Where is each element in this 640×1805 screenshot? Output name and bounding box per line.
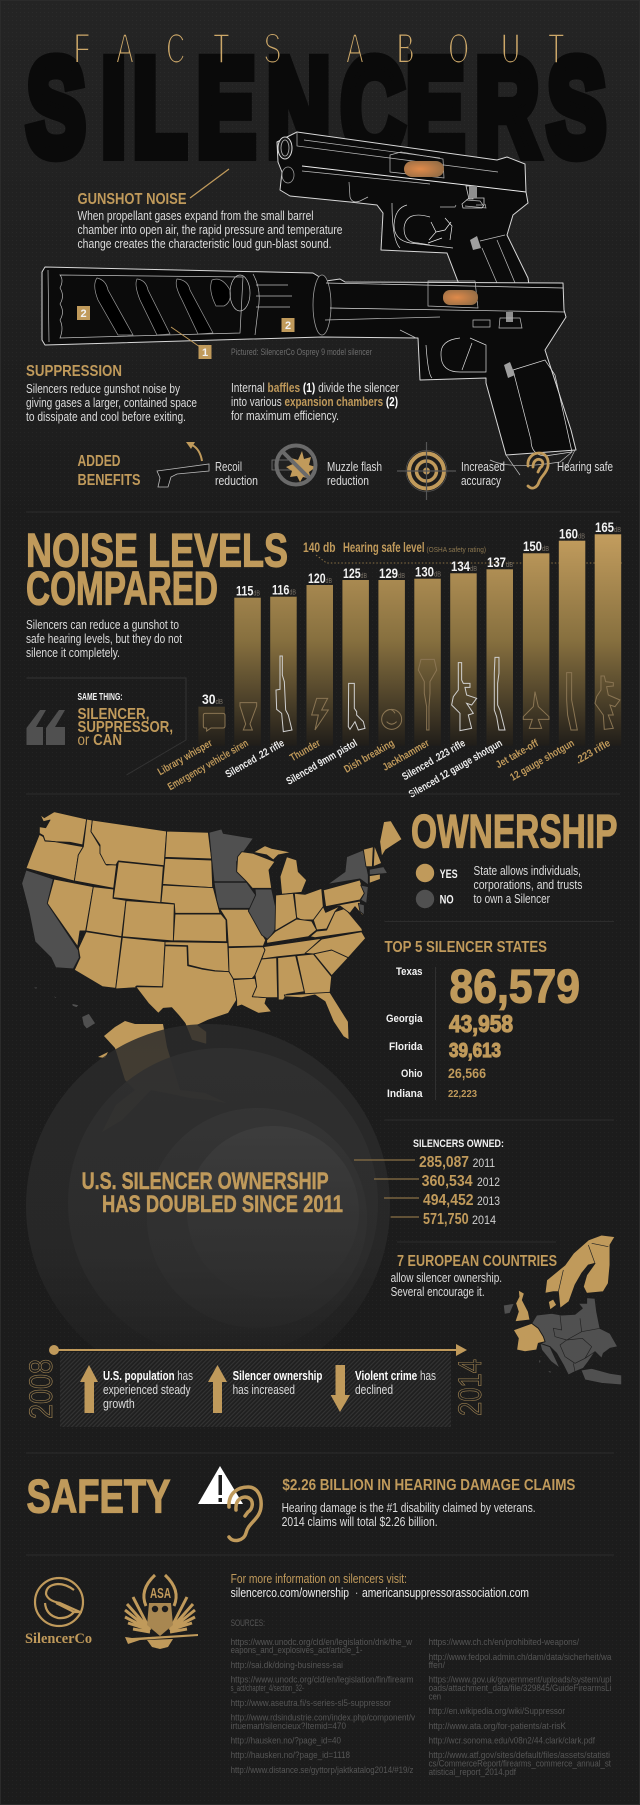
sources list: eapons_and_explosives_act/article_1- [231, 1645, 362, 1656]
bar: library whisper 30 dB: 30dB [202, 691, 223, 707]
bar: jet take-off 150 dB [523, 538, 549, 746]
logo: ASA owl [125, 1575, 198, 1649]
axis labels: noise sources: Silenced 9mm pistol [284, 737, 360, 788]
text: increased accuracy: Increased [461, 460, 505, 474]
list: top 5 states: 26,566 [448, 1066, 486, 1081]
text: gunshot noise explanation: When propellant gases expand from the small barrel [78, 209, 314, 223]
list: silencers owned by year: SILENCERS OWNED: [413, 1138, 504, 1150]
text: more information: For more information on silencers visit: [231, 1572, 407, 1586]
text: hearing safe: Hearing safe [557, 460, 613, 474]
panel: same thing callout: SILENCER, [78, 706, 150, 723]
heading: hearing damage claims: $2.26 BILLION IN HEARING DAMAGE CLAIMS [282, 1477, 575, 1494]
sources list: http://hausken.no/?page_id=1118 [231, 1750, 350, 1761]
label: marker 2 right [282, 318, 294, 332]
heading: suppression: SUPPRESSION [26, 363, 122, 380]
caption: pictured model: Pictured: SilencerCo Osprey 9 model silencer [231, 347, 372, 357]
timeline: 2008 to 2014 [23, 1344, 488, 1427]
text: silencer ownership [233, 1369, 323, 1397]
list: silencers owned by year: 360,534 [422, 1173, 473, 1190]
bar: dish breaking 129 dB [378, 565, 405, 746]
axis labels: noise sources: Silenced .22 rifle [223, 737, 287, 781]
bar: 12 gauge shotgun 160 dB [559, 526, 585, 746]
sources list: http://www.distance.se/gyttorp/jaktkatalog2014/#19/z [231, 1765, 414, 1776]
axis labels: noise sources: Jet take-off [494, 737, 541, 771]
text: violent crime: Violent crime has [355, 1369, 436, 1383]
text: noise intro: Silencers can reduce a gunshot to [26, 618, 179, 632]
icon: recoil gun and arrow [157, 442, 209, 487]
title: silencers: SILENCERS [27, 32, 606, 184]
list: top 5 states: 43,958 [449, 1011, 513, 1038]
bar: silenced 12 gauge shotgun 137 dB: 137dB [487, 554, 513, 570]
arrow up: silencer ownership [208, 1365, 227, 1413]
map: Alaska [98, 1021, 226, 1132]
bar: library whisper 30 dB [198, 691, 225, 746]
bar: thunder 120 dB: 120dB [308, 570, 332, 586]
bar: emergency vehicle siren 115 dB [234, 582, 261, 746]
panel: same thing callout [26, 678, 186, 775]
sources list: http://en.wikipedia.org/wiki/Suppressor [429, 1706, 565, 1717]
text: muzzle flash reduction: reduction [327, 474, 369, 488]
list: top 5 states: 22,223 [448, 1088, 477, 1100]
text: population: experienced steady [103, 1383, 191, 1397]
bar: emergency vehicle siren 115 dB: 115dB [236, 582, 260, 598]
list: silencers owned by year: 2014 [472, 1213, 496, 1227]
axis labels: noise sources: .223 rifle [574, 737, 613, 767]
callout line: gunshot noise [190, 169, 229, 198]
map: Europe [503, 1235, 622, 1385]
heading: noise levels compared [26, 524, 288, 614]
sources list: irtuemart/silencieux?Itemid=470 [231, 1721, 346, 1732]
text: suppression explanation: Silencers reduce gunshot noise by [26, 382, 181, 396]
text: europe explanation [391, 1271, 502, 1299]
list: silencers owned by year: 2012 [477, 1175, 500, 1189]
heading: noise levels compared: COMPARED [26, 562, 218, 614]
text: recoil reduction: Recoil [215, 460, 242, 474]
text: recoil reduction: reduction [215, 474, 258, 488]
text: baffles and chambers: for maximum efficiency. [231, 409, 339, 423]
bar: .223 rifle 165 dB: 165dB [595, 519, 621, 535]
icon: ear [528, 453, 548, 488]
sources list: http://hausken.no/?page_id=40 [231, 1736, 341, 1746]
text: noise intro: silence it completely. [26, 646, 120, 660]
list: silencers owned by year: 571,750 [423, 1211, 469, 1228]
bar: .223 rifle 165 dB [595, 519, 621, 746]
logo: ASA owl: ASA [150, 1585, 171, 1602]
list: silencers owned by year: 285,087 [419, 1154, 469, 1171]
label: marker 1 [198, 345, 212, 359]
icon: quotation mark [26, 710, 65, 745]
heading: ownership doubled: U.S. SILENCER OWNERSHIP [82, 1168, 329, 1195]
icon: muzzle flash crossed out [272, 446, 316, 484]
text: suppression explanation: to dissipate and cool before exiting. [26, 410, 186, 424]
sources list [231, 1618, 612, 1778]
map: United States ownership [22, 812, 402, 1044]
list: top 5 states: 39,613 [449, 1040, 501, 1062]
list: silencers owned by year [354, 1138, 504, 1228]
panel: same thing callout: SAME THING: [78, 692, 122, 703]
text: muzzle flash reduction: Muzzle flash [327, 460, 382, 474]
text: more information: americansuppressorassociation.com [362, 1586, 529, 1600]
legend: yes and no [416, 864, 582, 908]
sources list: http://www.aseutra.fi/s-series-sl5-suppressor [231, 1698, 391, 1709]
text: baffles and chambers [231, 381, 399, 423]
heading: added benefits: BENEFITS [78, 472, 140, 489]
icon: warning triangle and ear [198, 1466, 261, 1540]
text: baffles and chambers: Internal baffles (1) divide the silencer [231, 381, 399, 395]
sources list: http://www.rdsindustrie.com/index.php/component/v [231, 1712, 415, 1724]
heading: added benefits: ADDED [78, 453, 120, 470]
heading: safety: SAFETY [26, 1470, 170, 1522]
text: hearing damage [282, 1501, 536, 1529]
heading: added benefits [78, 453, 140, 489]
bar: silenced .22 rifle 116 dB: 116dB [272, 582, 296, 598]
bar: thunder 120 dB [306, 570, 333, 746]
arrow down: violent crime [331, 1365, 350, 1412]
legend: yes and no: State allows individuals, [474, 864, 581, 878]
sources list: https://www.ch.ch/en/prohibited-weapons/ [429, 1637, 579, 1648]
text: more information [231, 1572, 529, 1600]
bar: silenced .223 rifle 134 dB: 134dB [451, 558, 477, 574]
heading: ownership doubled [82, 1168, 343, 1218]
text: violent crime [355, 1369, 436, 1397]
axis labels: noise sources: Jackhammer [380, 737, 432, 774]
bar: silenced .223 rifle 134 dB [450, 558, 477, 746]
text: gunshot noise explanation: chamber into open air, the rapid pressure and temperature [78, 223, 343, 237]
panel: same thing callout: SUPPRESSOR, [78, 719, 173, 736]
sources list: https://www.unodc.org/cld/en/legislation/fin/firearm [231, 1674, 414, 1686]
sources list: atistical_report_2014.pdf [429, 1767, 516, 1778]
sources list: s_act/chapter_4/section_32- [231, 1683, 304, 1694]
list: silencers owned by year: 2011 [473, 1156, 495, 1170]
callout line: baffle marker [171, 327, 200, 347]
illustration: pistol cutaway [277, 132, 531, 300]
sources list: http://wcr.sonoma.edu/v08n2/44.clark/clark.pdf [429, 1736, 595, 1746]
list: silencers owned by year: 2013 [477, 1194, 500, 1208]
heading: 7 european countries: 7 EUROPEAN COUNTRIES [397, 1253, 557, 1270]
list: top 5 states: Georgia [386, 1013, 423, 1025]
label: 2014: 2014 [452, 1359, 488, 1416]
bar chart: noise levels [198, 519, 621, 746]
label: marker 1: 1 [202, 347, 208, 359]
sources list: cen [429, 1692, 441, 1702]
bar: jackhammer 130 dB [414, 564, 441, 746]
heading: ownership doubled: HAS DOUBLED SINCE 2011 [102, 1191, 343, 1218]
axis labels: noise sources: Library whisper [156, 737, 214, 778]
legend: yes and no: corporations, and trusts [474, 878, 582, 892]
label: marker 2 left [77, 306, 90, 320]
text: hearing damage: 2014 claims will total $2.26 billion. [282, 1515, 438, 1529]
sources list: SOURCES: [231, 1618, 265, 1629]
list: silencers owned by year: 494,452 [423, 1192, 474, 1209]
label: 2008: 2008 [23, 1359, 59, 1419]
bar: silenced .22 rifle 116 dB [270, 582, 297, 746]
bar: silenced 9mm pistol 125 dB: 125dB [343, 565, 367, 581]
legend: yes and no: to own a Silencer [474, 892, 550, 906]
text: silencer ownership: Silencer ownership [233, 1369, 323, 1383]
sources list: http://www.fedpol.admin.ch/dam/data/sicherheit/wa [429, 1652, 612, 1663]
text: noise intro [26, 618, 182, 660]
label: marker 2 left: 2 [80, 308, 87, 320]
bar: dish breaking 129 dB: 129dB [379, 565, 405, 581]
text: gunshot noise explanation: change creates the characteristic loud gun-blast sound. [78, 237, 332, 251]
text: gunshot noise explanation [78, 209, 343, 251]
list: top 5 states: Texas [396, 966, 422, 978]
text: more information: · [354, 1586, 359, 1600]
logo: SilencerCo: SilencerCo [25, 1631, 92, 1647]
panel: same thing callout: or CAN [78, 732, 122, 749]
text: europe explanation: allow silencer ownership. [391, 1271, 502, 1285]
axis labels: noise sources: Emergency vehicle siren [166, 737, 250, 793]
sources list: https://www.gov.uk/government/uploads/system/upl [429, 1674, 611, 1686]
bar: jet take-off 150 dB: 150dB [523, 538, 549, 554]
text: suppression explanation: giving gases a larger, contained space [26, 396, 197, 410]
list: top 5 states [386, 960, 580, 1100]
text: recoil reduction [215, 460, 258, 488]
sources list: ffen/ [429, 1660, 445, 1671]
label: marker 2 right: 2 [285, 320, 291, 332]
bar: silenced 9mm pistol 125 dB [342, 565, 369, 746]
icon: target [397, 442, 456, 500]
list: top 5 states: 86,579 [450, 960, 580, 1012]
list: top 5 states: Ohio [401, 1068, 423, 1080]
text: europe explanation: Several encourage it. [391, 1285, 485, 1299]
bar: jackhammer 130 dB: 130dB [415, 564, 441, 580]
sources list: oads/attachment_data/file/329845/GuideFirearmsLi [429, 1683, 611, 1694]
text: violent crime: declined [355, 1383, 393, 1397]
axis labels: noise sources: Silenced .223 rifle [400, 737, 468, 783]
bar: 12 gauge shotgun 160 dB: 160dB [559, 526, 585, 542]
arrow up: population [80, 1365, 98, 1413]
annotation: 140 db hearing safe level: 140 db [303, 539, 336, 555]
axis labels: noise sources: Dish breaking [342, 737, 396, 776]
axis labels: noise sources [156, 737, 613, 801]
text: noise intro: safe hearing levels, but they do not [26, 632, 182, 646]
heading: gunshot noise: GUNSHOT NOISE [78, 191, 186, 208]
legend: yes and no: YES [440, 869, 458, 881]
text: suppression explanation [26, 382, 197, 424]
illustration: pistol with silencer [42, 267, 576, 475]
sources list: http://www.atf.gov/sites/default/files/assets/statisti [429, 1750, 610, 1761]
bar: silenced 12 gauge shotgun 137 dB [486, 554, 513, 746]
text: muzzle flash reduction [327, 460, 382, 488]
list: top 5 states: Indiana [387, 1088, 423, 1100]
legend: yes and no: NO [440, 894, 454, 906]
text: population: U.S. population has [103, 1369, 193, 1383]
text: population [103, 1369, 193, 1411]
text: hearing damage: Hearing damage is the #1 disability claimed by veterans. [282, 1501, 536, 1515]
list: top 5 states: Florida [389, 1041, 423, 1053]
concentric rings: ownership growth [26, 1024, 390, 1388]
text: increased accuracy [461, 460, 505, 488]
axis labels: noise sources: 12 gauge shotgun [508, 737, 576, 784]
annotation: 140 db hearing safe level: Hearing safe level [343, 540, 424, 555]
text: population: growth [103, 1397, 135, 1411]
heading: noise levels compared: NOISE LEVELS [26, 524, 288, 576]
text: silencer ownership: has increased [233, 1383, 295, 1397]
heading: top 5 silencer states: TOP 5 SILENCER STATES [384, 939, 547, 956]
logo: SilencerCo [25, 1578, 92, 1647]
text: baffles and chambers: into various expansion chambers (2) [231, 395, 398, 409]
annotation: 140 db hearing safe level [303, 539, 622, 563]
text: more information: silencerco.com/ownership [231, 1586, 349, 1600]
annotation: 140 db hearing safe level: (OSHA safety rating) [426, 545, 486, 554]
sources list: http://sai.dk/doing-business-sai [231, 1660, 343, 1671]
axis labels: noise sources: Thunder [288, 737, 322, 764]
title: facts about: FACTS ABOUT [74, 25, 564, 73]
sources list: https://www.unodc.org/cld/en/legislation/dnk/the_w [231, 1637, 412, 1648]
sources list: http://www.ata.org/for-patients/at-risK [429, 1721, 567, 1732]
text: increased accuracy: accuracy [461, 474, 502, 488]
axis labels: noise sources: Silenced 12 gauge shotgun [407, 737, 504, 801]
